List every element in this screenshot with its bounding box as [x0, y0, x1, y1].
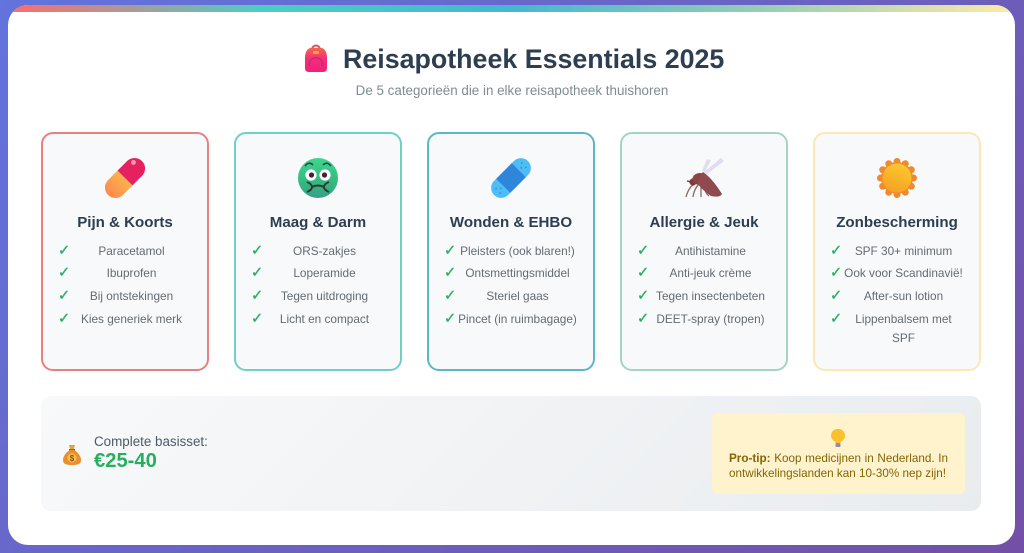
panel: Maag & Darm: Licht en compact — [280, 312, 369, 326]
panel: Wonden & EHBO: ✓ — [444, 265, 456, 281]
panel: Wonden & EHBO: ✓ — [444, 311, 456, 327]
panel: footer bar — [41, 396, 981, 511]
panel: Zonbescherming: ✓ — [830, 265, 842, 281]
panel: Wonden & EHBO: Pincet (in ruimbagage) — [458, 312, 577, 326]
panel: Maag & Darm: Loperamide — [293, 266, 356, 280]
panel: Maag & Darm: Tegen uitdroging — [281, 289, 368, 303]
panel: Wonden & EHBO: ✓ — [444, 243, 456, 259]
panel: Pijn & Koorts: ✓ — [58, 288, 70, 304]
checklist — [830, 243, 963, 345]
panel: Maag & Darm: ORS-zakjes — [293, 244, 356, 258]
panel: Zonbescherming: ✓ — [830, 311, 842, 327]
panel: Wonden & EHBO: Pleisters (ook blaren!) — [460, 244, 575, 258]
panel: Allergie & Jeuk: ✓ — [637, 288, 649, 304]
icon: pill — [104, 158, 146, 198]
panel: Zonbescherming: ✓ — [830, 243, 842, 259]
icon: light bulb — [830, 429, 845, 447]
icon: bandage — [491, 158, 531, 198]
panel: Wonden & EHBO: Steriel gaas — [486, 289, 549, 303]
checklist — [251, 243, 369, 327]
heading: Maag & Darm — [270, 214, 366, 231]
panel: Allergie & Jeuk: ✓ — [637, 243, 649, 259]
panel: Allergie & Jeuk — [620, 132, 788, 371]
panel: Pijn & Koorts: Ibuprofen — [107, 266, 156, 280]
icon: nauseated face — [298, 158, 338, 198]
checklist — [444, 243, 577, 327]
heading: Pijn & Koorts — [77, 214, 173, 231]
icon: money bag — [63, 445, 81, 465]
callout: pro-tip — [712, 413, 965, 494]
panel: Zonbescherming: ✓ — [830, 288, 842, 304]
icon: mosquito — [685, 158, 724, 198]
panel: Maag & Darm: ✓ — [251, 243, 263, 259]
panel: Zonbescherming — [813, 132, 981, 371]
panel: Allergie & Jeuk: Tegen insectenbeten — [656, 289, 765, 303]
panel: Maag & Darm: ✓ — [251, 265, 263, 281]
panel: Pijn & Koorts: Bij ontstekingen — [90, 289, 173, 303]
panel: Pijn & Koorts: ✓ — [58, 265, 70, 281]
panel: Wonden & EHBO: ✓ — [444, 288, 456, 304]
panel: Allergie & Jeuk: ✓ — [637, 311, 649, 327]
icon: money bag: $ — [70, 454, 75, 463]
panel: Zonbescherming: SPF 30+ minimum — [855, 244, 952, 258]
panel: Zonbescherming: After-sun lotion — [864, 289, 943, 303]
panel: Allergie & Jeuk: Antihistamine — [675, 244, 746, 258]
heading: Zonbescherming — [836, 214, 958, 231]
panel: Allergie & Jeuk: DEET-spray (tropen) — [656, 312, 765, 326]
panel: Pijn & Koorts — [41, 132, 209, 371]
panel: Pijn & Koorts: Kies generiek merk — [81, 312, 182, 326]
panel: Allergie & Jeuk: ✓ — [637, 265, 649, 281]
icon: backpack — [305, 44, 327, 72]
tip text: Pro-tip: Koop medicijnen in Nederland. In ontwikkelingslanden kan 10-30% nep zijn! — [729, 452, 948, 480]
panel: Pijn & Koorts: Paracetamol — [98, 244, 165, 258]
panel: Pijn & Koorts: ✓ — [58, 243, 70, 259]
icon: sun — [877, 158, 917, 198]
cost label: Complete basisset: — [94, 434, 208, 448]
cost value: €25-40 — [94, 450, 157, 472]
panel: Pijn & Koorts: ✓ — [58, 311, 70, 327]
panel: Wonden & EHBO: Ontsmettingsmiddel — [465, 266, 570, 280]
checklist — [58, 243, 182, 327]
panel: Maag & Darm — [234, 132, 402, 371]
heading: Allergie & Jeuk — [649, 214, 759, 231]
rainbow top stripe — [8, 5, 1015, 12]
checklist — [637, 243, 765, 327]
title: Reisapotheek Essentials 2025 — [343, 44, 724, 74]
panel: Zonbescherming: Lippenbalsem met SPF — [855, 312, 952, 345]
subtitle: De 5 categorieën die in elke reisapotheek thuishoren — [356, 82, 668, 98]
panel: Wonden & EHBO — [427, 132, 595, 371]
panel: Zonbescherming: Ook voor Scandinavië! — [844, 266, 963, 280]
heading: Wonden & EHBO — [450, 214, 572, 231]
panel: Maag & Darm: ✓ — [251, 288, 263, 304]
panel: Maag & Darm: ✓ — [251, 311, 263, 327]
panel: Allergie & Jeuk: Anti-jeuk crème — [670, 266, 751, 280]
